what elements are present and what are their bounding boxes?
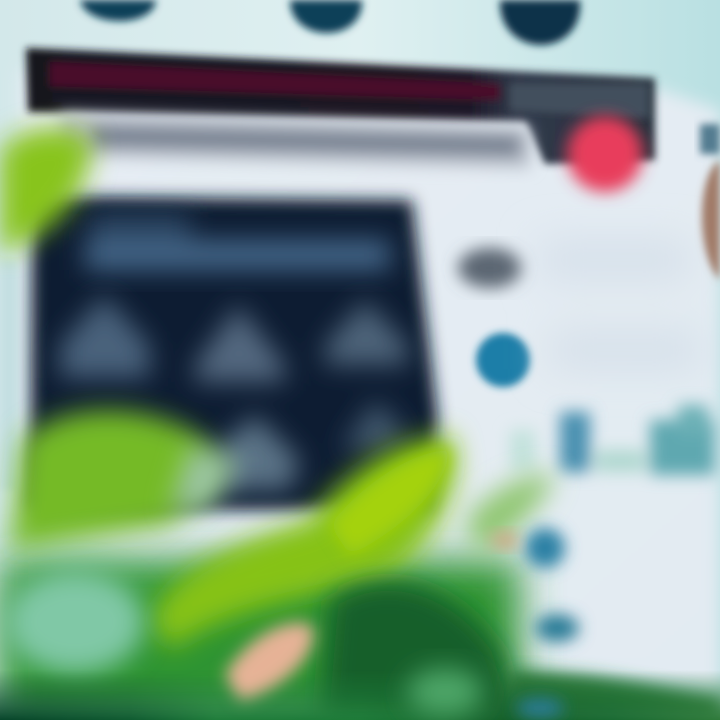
header right grey block bbox=[510, 84, 648, 118]
top dark dots bbox=[80, 0, 580, 45]
pink fingertip bbox=[225, 623, 314, 700]
small pink accent bbox=[491, 531, 519, 549]
header title text blur bbox=[50, 62, 500, 100]
panel icons bbox=[60, 295, 408, 490]
subtitle strip bbox=[60, 112, 530, 168]
dark panel bbox=[30, 196, 438, 510]
small bar chart bbox=[510, 405, 715, 475]
foliage: lower mass bbox=[0, 410, 720, 720]
grey label blob bbox=[458, 248, 522, 288]
header band bbox=[26, 48, 655, 164]
foliage: bottom edge floor bbox=[0, 670, 720, 720]
blue dots bbox=[516, 528, 579, 718]
right-edge figure bbox=[700, 124, 720, 280]
red circle badge bbox=[567, 116, 643, 192]
faint text lines bbox=[540, 240, 700, 370]
panel heading text blur bbox=[85, 215, 390, 270]
foliage: upper left leaf bbox=[0, 128, 92, 252]
blue circle bbox=[476, 333, 530, 387]
left edge strip bbox=[0, 260, 18, 490]
